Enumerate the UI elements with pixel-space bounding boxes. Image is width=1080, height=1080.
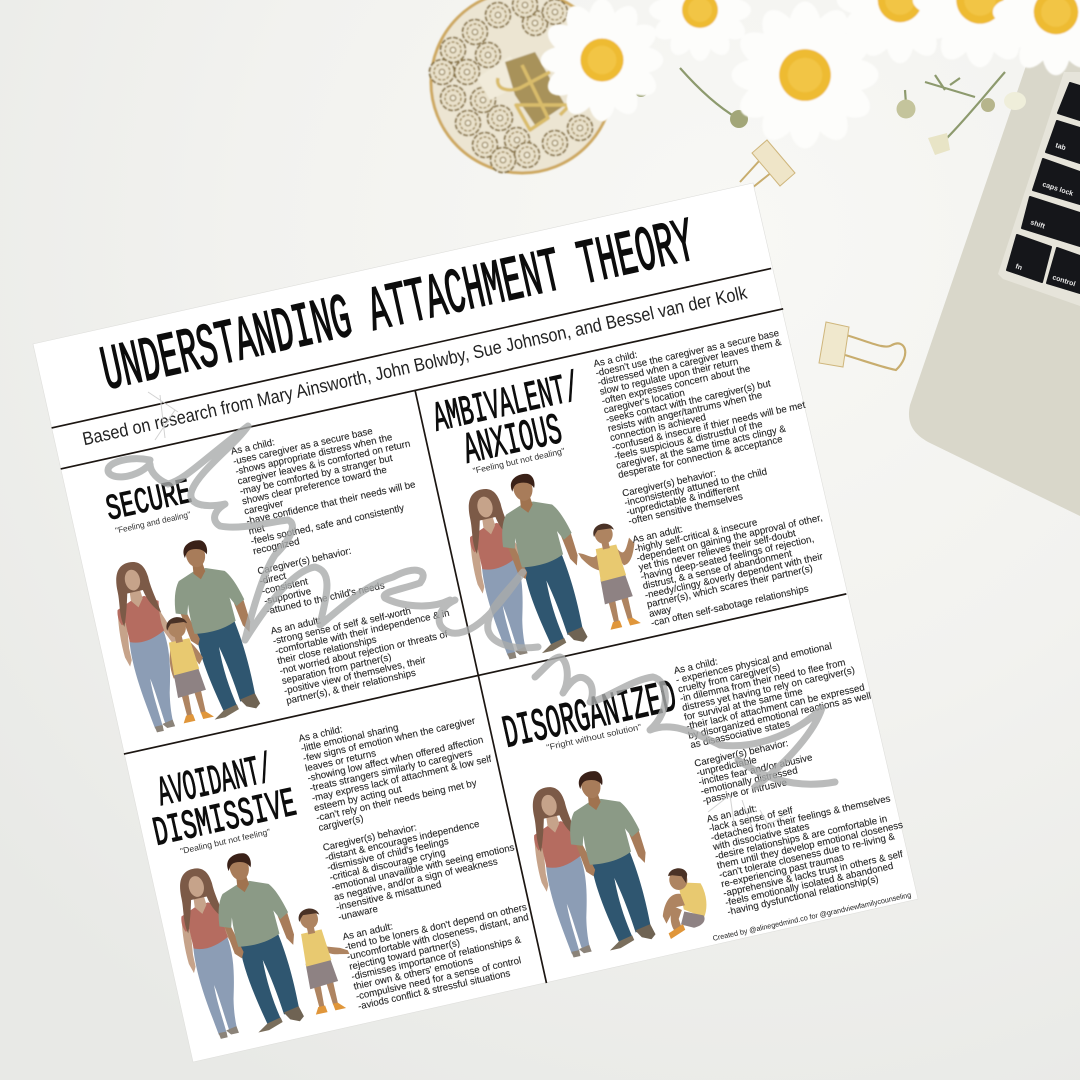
body text: distress yet having to rely on caregiver(s) [681,665,856,714]
body text: -highly self-critical & insecure [634,517,758,555]
body text: -detached from their feelings & themselves [710,793,892,844]
panel: disorganized [497,625,916,965]
sitting child [653,864,713,940]
body text: -confused & insecure if thier needs will be met [611,400,807,453]
body text: -passive or intrusive [702,777,788,807]
body text: caregiver, at the same time acts clingy & [615,423,787,472]
watermark: thin logo lower [708,795,785,830]
laptop [909,60,1080,516]
body text: As a child: [230,437,276,458]
panel: ambivalent / anxious [429,316,846,665]
body text: As a child: [593,350,639,370]
panel: avoidant / dismissive [140,693,542,1048]
body text: -dismissive of child's feelings [326,836,450,874]
body text: -have confidence that their needs will be [245,479,417,527]
panel: secure [85,408,462,739]
body text: re-experiencing past traumas [720,852,845,890]
body text: -strong sense of self & self-worth [272,606,412,647]
body text: -can't rely on their needs being met by [315,778,478,824]
body text: -supportive [263,586,312,607]
flower stems [680,68,1005,140]
body text: thier own & others' emotions [353,956,474,993]
body text: -feels suspicious & distrustful of the [613,419,764,463]
body text: -often sensitive themselves [627,491,744,527]
body text: connection is achieved [609,412,707,444]
key labels [1014,142,1076,288]
watermark: thin logo upper [148,392,178,440]
heading: ambivalent: AMBIVALENT/ [429,365,584,443]
body text: As an adult: [342,921,394,943]
body text: -unaware [337,904,379,923]
key labels: caps lock [1041,181,1074,198]
body text: -showing low affect when offered affection [306,735,484,784]
body text: -lack a sense of self [708,805,794,835]
body text: -desire relationships & are comfortable in [714,814,888,862]
sheet content, rotated with the paper [35,191,920,1062]
body text: -may be comforted by a stranger but [239,453,394,497]
family illustration [456,454,653,664]
grid lines [52,268,915,1062]
body text: as disassociative states [689,718,791,751]
heading: anxious: ANXIOUS [459,406,567,477]
body text: -attuned to the child's needs [265,580,386,617]
body text: -incites fear and/or abusive [698,752,814,788]
body text: -consistent [261,576,309,597]
body text: Caregiver(s) behavior: [256,546,352,577]
body text: -shows appropriate distress when the [234,432,393,478]
body text: -direct [259,571,288,587]
body text: distrust, & a sense of abandonment [642,548,793,592]
body text: esteem by acting out [313,784,403,814]
body text: partner(s), & their relationships [285,668,417,707]
body text: -positive view of themselves, their [283,655,428,697]
body text: -aviods conflict & stressful situations [357,968,511,1013]
body text: -in dilemma from their need to flee from [679,657,846,705]
body text: caregiver leaves & is comforted on return [237,439,411,487]
tagline: "Dealing but not feeling" [179,826,271,856]
body text: -little emotional sharing [300,722,400,755]
credit line: Created by @alinegedmind.co for @grandviewfamilycounseling [712,890,912,943]
body text: -their lack of attachment can be expressed [685,682,866,733]
body text: them until they develop emotional closeness [716,820,904,872]
body text: -having dysfunctional relationship(s) [726,874,880,918]
body text: -uses caregiver as a secure base [232,426,374,468]
body text: desperate for connection & acceptance [617,434,784,481]
body text: -seeks contact with the caregiver(s) but [605,378,772,426]
body text: Caregiver(s) behavior: [693,738,789,770]
body text: -can't tolerate closeness due to re-living & [718,831,896,881]
gold clip on plate [477,56,530,100]
paper sheet [33,183,918,1062]
body text: -critical & discourage crying [328,847,446,884]
body text: -emotionally distressed [700,765,799,797]
body text: -distressed when a caregiver leaves them & [597,337,783,388]
heading: disorganized: DISORGANIZED [498,672,681,761]
keyboard tray [998,72,1080,306]
binder clip lower [819,322,905,370]
body text: as negative, and/or a sign of weakness [333,856,499,903]
body text: -not worried about rejection or threats of [279,629,449,677]
body text: yet this never relieves their self-doubt [638,528,797,574]
family illustration [103,533,269,736]
key labels: tab [1054,142,1067,152]
body text: -dismisses importance of relationships & [350,934,523,983]
body text: met [248,523,266,537]
body text: -few signs of emotion when the caregiver [302,716,477,765]
body text: slow to regulate upon their return [599,356,739,398]
tagline: "Feeling but not dealing" [472,446,566,476]
body text: -uncomfortable with closeness, distant, and [346,912,530,963]
body text: -unpredictable & indifferent [625,482,741,518]
body text: As an adult: [270,615,322,637]
body text: -insensitive & misattuned [335,879,443,913]
binder clip top [740,140,795,188]
laptop body [909,60,1080,516]
key labels: fn [1014,263,1023,272]
body text: As an adult: [706,803,758,825]
body text: by disorganized emotional reactions as well [687,691,872,742]
keyboard keys [1007,83,1080,293]
body text: -often expresses concern about the [601,363,751,407]
body text: -unpredictable [696,755,758,779]
body text: -treats strangers similarly to caregivers [309,748,474,794]
body text: -feels soothed, safe and consistently [250,503,405,547]
body text: cargiver(s) [317,813,365,834]
family illustration [520,753,713,964]
body text: -can often self-sabotage relationships [650,584,810,629]
body text: Caregiver(s) behavior: [322,822,418,854]
body text: recognized [252,536,301,557]
body text: their close relationships [276,634,378,667]
key labels: control [1051,274,1076,288]
body text: -compulsive need for a sense of control [355,955,522,1003]
body text: resists with anger/tantrums when the [607,390,763,435]
body text: cruelty from caregiver(s) [677,662,781,695]
body text: -distant & encourages independence [324,819,481,864]
heading: secure: SECURE [102,472,195,530]
body text: -tend to be loners & don't depend on others [344,902,528,953]
body text: caregiver [243,498,285,517]
daisies [541,0,1080,148]
key labels: shift [1029,219,1046,231]
body text: -comfortable with their independence & in [274,608,451,657]
body text: separation from partner(s) [281,652,393,687]
body text: partner(s), which scares their partner(s) [646,563,814,611]
body text: -may express lack of attachment & low self [311,754,493,804]
body text: As a child: [673,656,719,677]
decorative gold plate [430,0,613,173]
body text: away [648,604,673,620]
body text: -doesn't use the caregiver as a secure base [595,328,780,379]
family illustration [168,835,362,1044]
body text: Caregiver(s) behavior: [621,468,717,500]
body text: shows clear preference toward the [241,465,388,507]
body text: caregiver's location [603,388,686,416]
body text: -inconsistently attuned to the child [623,466,768,509]
heading: avoidant: AVOIDANT/ [153,746,277,818]
body text: with dissociative states [711,821,811,853]
flower buds [634,83,1026,155]
body text: As an adult: [632,524,684,546]
watermark: script signature [108,426,835,787]
body text: -having deep-seated feelings of rejection, [640,534,815,583]
body text: -apprehensive & lacks trust in others & self [722,849,904,899]
tagline: "Feeling and dealing" [114,509,192,535]
body text: -dependent on gaining the approval of other, [636,512,824,564]
heading: dismissive: DISMISSIVE [149,782,301,858]
body text: for survival at the same time [683,686,804,723]
body text: As a child: [298,724,344,745]
body text: -emotional unavailible with seeing emotions [331,842,516,893]
body text: rejecting toward partner(s) [348,938,461,973]
body text: leaves or returns [304,748,377,774]
body text: - experiences physical and emotional [675,641,833,686]
body text: -feels emotionally isolated & abandoned [724,861,894,909]
body text: -needy/clingy &overly dependent with their [644,551,825,601]
tagline: "Fright without solution" [545,722,642,752]
subtitle: Based on research from Mary Ainsworth, John Bolwby, Sue Johnson, and Bessel van der Kolk [80,281,750,449]
